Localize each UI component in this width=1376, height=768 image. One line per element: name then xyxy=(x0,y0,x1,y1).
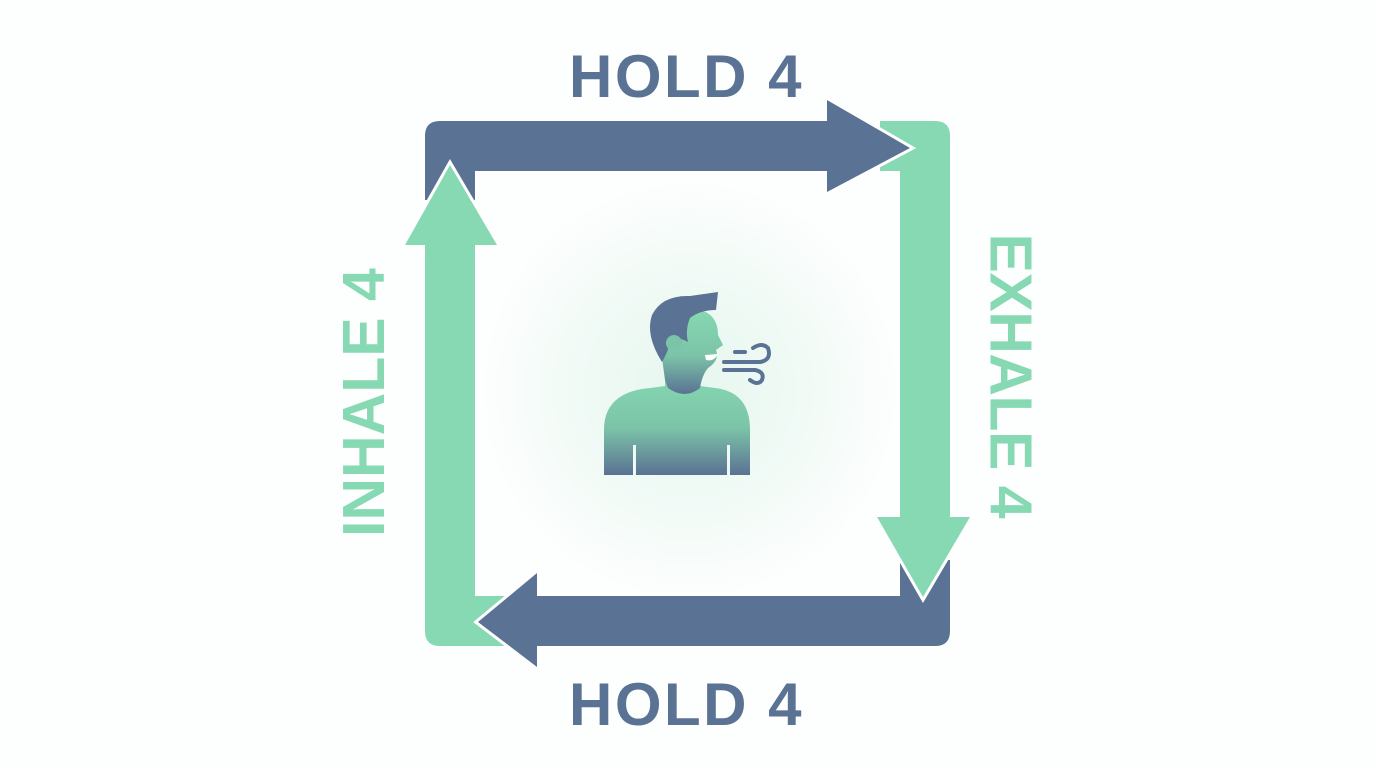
heading: top hold: HOLD 4 xyxy=(569,43,804,110)
arrow: inhale up xyxy=(405,165,505,646)
hair xyxy=(650,292,718,362)
mouth xyxy=(705,354,718,360)
arrow: exhale down xyxy=(877,121,970,597)
head xyxy=(660,308,723,394)
body xyxy=(604,370,750,475)
heading: exhale: EXHALE 4 xyxy=(978,234,1044,518)
background glow xyxy=(480,180,900,600)
arrow: hold top right xyxy=(425,100,910,200)
arrowhead: inhale tip xyxy=(405,165,497,270)
heading: bottom hold: HOLD 4 xyxy=(569,671,804,738)
icon: person exhaling xyxy=(604,292,771,475)
wind xyxy=(724,345,769,383)
arrow: hold bottom left xyxy=(478,560,950,667)
heading: inhale: INHALE 4 xyxy=(331,268,397,537)
ear xyxy=(666,335,682,351)
